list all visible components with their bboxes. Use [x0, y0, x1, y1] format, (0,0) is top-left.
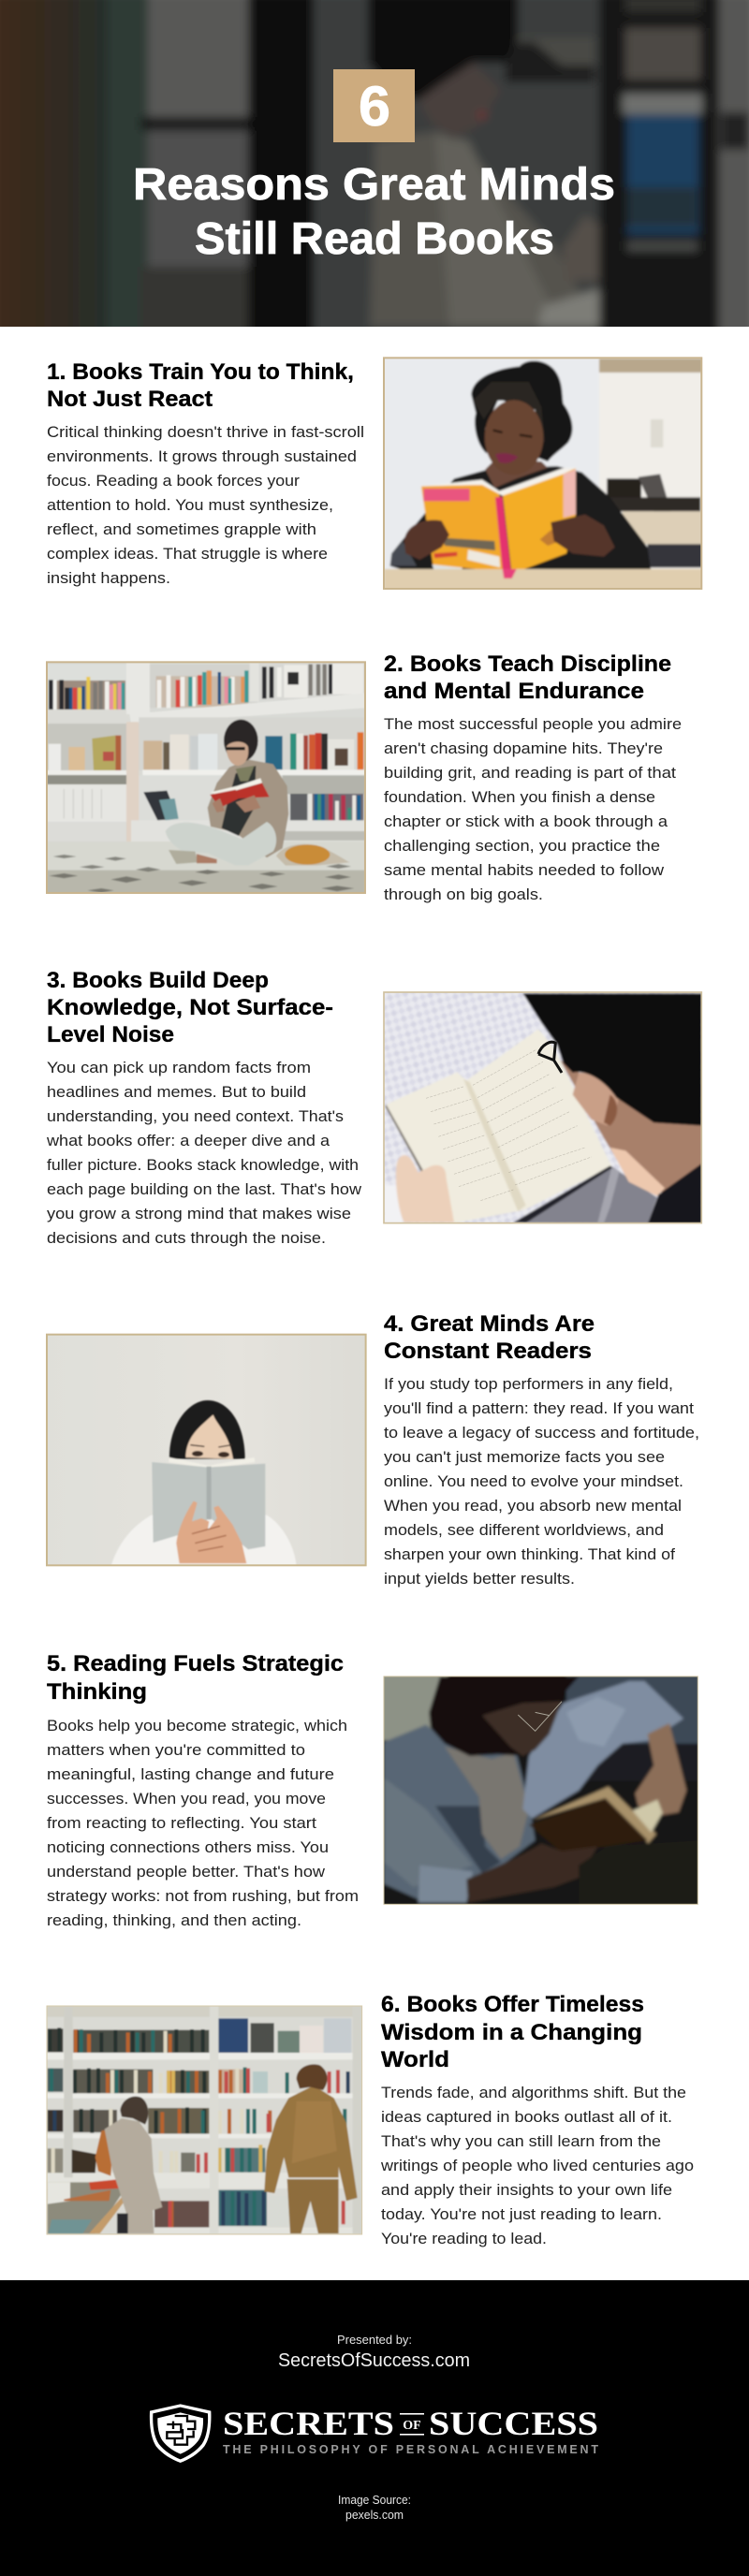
text block: today. You're not just reading to learn.	[381, 2206, 662, 2223]
text block: When you read, you absorb new mental	[384, 1498, 682, 1515]
text block: reading, thinking, and then acting.	[47, 1912, 301, 1929]
text block	[380, 2085, 694, 2247]
text block: building grit, and reading is part of that	[384, 765, 676, 782]
text block: models, see different worldviews, and	[384, 1522, 664, 1539]
text block: what books offer: a deeper dive and a	[46, 1133, 330, 1149]
presented by	[278, 2333, 470, 2371]
heading	[47, 359, 354, 412]
panel: reason 6	[42, 1992, 694, 2247]
photo: man reading open book over shoulder	[379, 988, 707, 1229]
badge number 6: 6	[359, 75, 390, 138]
photo: two people browsing bookstore shelves	[42, 2001, 370, 2242]
text block	[47, 424, 364, 587]
text block: That's why you can still learn from the	[381, 2133, 661, 2150]
heading: 1. Books Train You to Think,	[47, 359, 354, 385]
text block: chapter or stick with a book through a	[384, 813, 668, 830]
heading: 2. Books Teach Discipline	[384, 651, 671, 677]
wordmark: THE PHILOSOPHY OF PERSONAL ACHIEVEMENT	[223, 2443, 598, 2456]
text block: ideas captured in books outlast all of it.	[381, 2109, 672, 2126]
text block: understand people better. That's how	[47, 1864, 325, 1881]
text block	[47, 1718, 359, 1929]
text block: you can't just memorize facts you see	[384, 1449, 665, 1466]
image source	[338, 2493, 411, 2522]
text block	[384, 1376, 699, 1588]
text block: The most successful people you admire	[384, 716, 682, 733]
panel: header hero photo	[0, 0, 749, 337]
wordmark: SECRETS	[223, 2405, 394, 2442]
text block: input yields better results.	[384, 1571, 575, 1588]
wordmark: SUCCESS	[429, 2405, 598, 2442]
photo: woman peeking over gray book	[42, 1331, 370, 1572]
text block: foundation. When you finish a dense	[384, 789, 655, 806]
text block: strategy works: not from rushing, but from	[47, 1888, 359, 1905]
panel: reason 5	[47, 1651, 707, 1929]
text block: from reacting to reflecting. You start	[47, 1815, 316, 1832]
heading: Knowledge, Not Surface-	[47, 995, 333, 1020]
text block: writings of people who lived centuries ago	[380, 2158, 694, 2174]
text block: meaningful, lasting change and future	[47, 1766, 334, 1783]
panel: reason 1	[47, 354, 707, 594]
text block: Trends fade, and algorithms shift. But the	[381, 2085, 686, 2101]
text block: focus. Reading a book forces your	[47, 473, 301, 490]
heading: Wisdom in a Changing	[381, 2020, 642, 2045]
text block: decisions and cuts through the noise.	[47, 1230, 326, 1247]
text block: attention to hold. You must synthesize,	[47, 497, 333, 514]
text block: reflect, and sometimes grapple with	[47, 521, 316, 538]
image source: pexels.com	[345, 2508, 404, 2522]
text block: aren't chasing dopamine hits. They're	[384, 740, 663, 757]
logo: Secrets of Success	[150, 2404, 598, 2463]
text block: you grow a strong mind that makes wise	[47, 1206, 351, 1222]
panel: reason 4	[42, 1311, 699, 1588]
photo: woman reading on floor before bookshelves	[42, 658, 370, 899]
heading: 6. Books Offer Timeless	[381, 1992, 644, 2017]
text block: matters when you're committed to	[47, 1742, 305, 1759]
image source: Image Source:	[338, 2493, 411, 2507]
heading: 3. Books Build Deep	[47, 968, 269, 993]
heading	[47, 1651, 344, 1705]
text block: successes. When you read, you move	[47, 1791, 326, 1808]
heading: Thinking	[47, 1679, 147, 1705]
text block: understanding, you need context. That's	[47, 1108, 344, 1125]
heading	[384, 651, 671, 704]
heading: Constant Readers	[384, 1339, 592, 1364]
icon: shield monogram	[150, 2404, 211, 2463]
panel: footer	[0, 2280, 749, 2576]
text block: You're reading to lead.	[381, 2231, 547, 2247]
title: Still Read Books	[195, 214, 554, 264]
wordmark	[223, 2405, 598, 2456]
text block: You can pick up random facts from	[47, 1060, 311, 1076]
photo: man in glasses reading old book	[379, 1672, 707, 1912]
text block: complex ideas. That struggle is where	[47, 546, 328, 563]
text block: sharpen your own thinking. That kind of	[384, 1546, 675, 1563]
text block: online. You need to evolve your mindset.	[384, 1473, 683, 1490]
photo: woman reading orange book	[379, 354, 707, 594]
text block: challenging section, you practice the	[384, 838, 660, 855]
text block: headlines and memes. But to build	[47, 1084, 306, 1101]
title: Reasons Great Minds	[133, 160, 615, 210]
text block: through on big goals.	[384, 886, 543, 903]
text block: and apply their insights to your own life	[381, 2182, 672, 2199]
heading	[47, 968, 333, 1047]
heading: 4. Great Minds Are	[384, 1311, 595, 1337]
text block: same mental habits needed to follow	[384, 862, 664, 879]
text block: environments. It grows through sustained	[47, 448, 357, 465]
heading: Level Noise	[47, 1022, 174, 1047]
heading	[384, 1311, 595, 1364]
heading	[381, 1992, 644, 2072]
text block: you'll find a pattern: they read. If you want	[384, 1400, 694, 1417]
text block: fuller picture. Books stack knowledge, with	[47, 1157, 359, 1174]
text block: Critical thinking doesn't thrive in fast-scroll	[47, 424, 364, 441]
presented by: SecretsOfSuccess.com	[278, 2350, 470, 2371]
title	[133, 160, 615, 264]
text block: Books help you become strategic, which	[47, 1718, 347, 1734]
text block: to leave a legacy of success and fortitude,	[384, 1425, 699, 1442]
wordmark: OF	[403, 2419, 421, 2433]
text block: noticing connections others miss. You	[47, 1839, 329, 1856]
text block	[46, 1060, 361, 1247]
text block: insight happens.	[47, 570, 170, 587]
heading: Not Just React	[47, 387, 213, 412]
panel: reason 2	[42, 651, 682, 903]
presented by: Presented by:	[337, 2333, 412, 2347]
text block	[384, 716, 682, 903]
text block: each page building on the last. That's how	[47, 1181, 361, 1198]
badge number 6	[333, 69, 415, 142]
heading: and Mental Endurance	[384, 679, 644, 704]
panel: reason 3	[46, 968, 707, 1247]
heading: 5. Reading Fuels Strategic	[47, 1651, 344, 1676]
text block: If you study top performers in any field,	[384, 1376, 673, 1393]
heading: World	[381, 2047, 449, 2072]
